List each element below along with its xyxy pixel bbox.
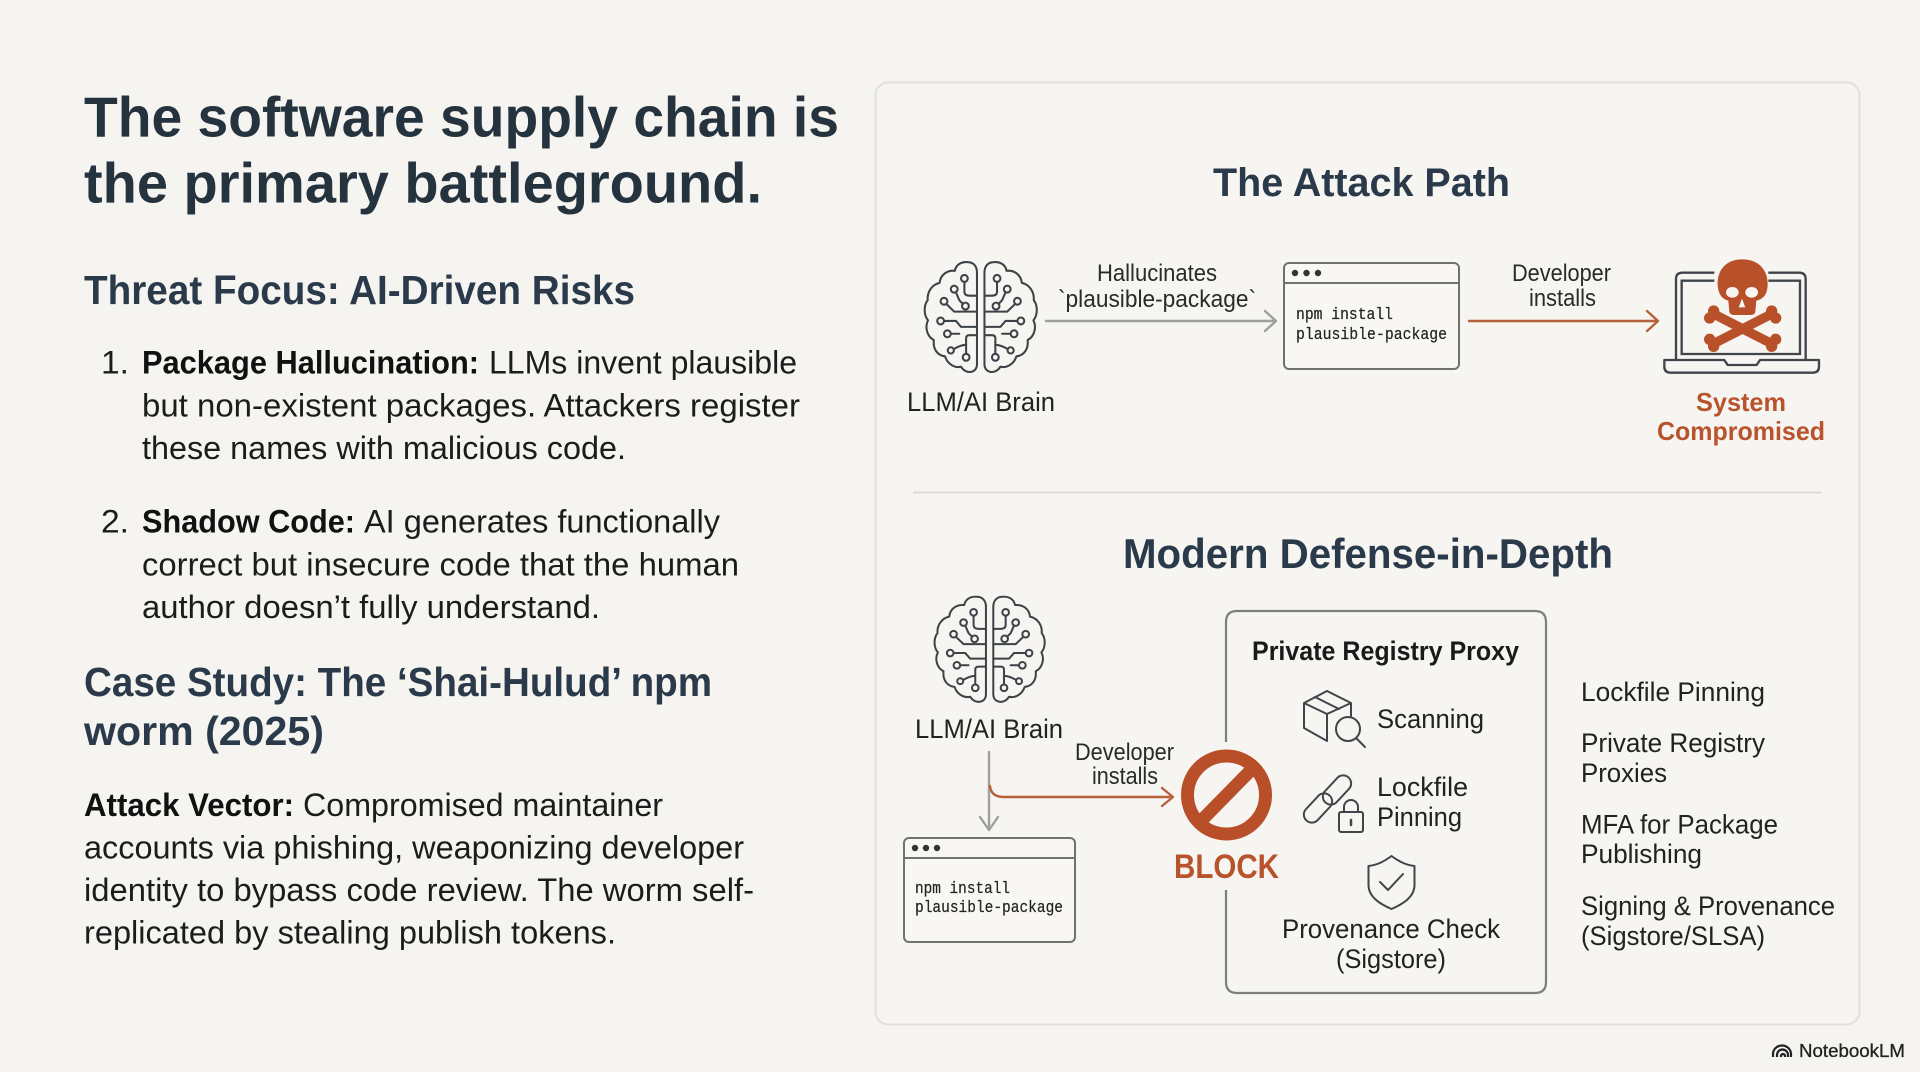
- case study text: attack vector: identity to bypass code review. The worm self-: [84, 872, 754, 908]
- icon: brain: [925, 262, 1037, 372]
- label: system compromised: [1657, 387, 1825, 446]
- list: defense measures: MFA for Package: [1581, 810, 1778, 840]
- heading: modern defense-in-depth: Modern Defense-in-Depth: [1123, 530, 1613, 577]
- arrow: terminal to compromised: [1469, 311, 1658, 331]
- label: developer installs: Developer: [1075, 739, 1174, 766]
- arrow: brain to terminal: [1046, 311, 1276, 331]
- terminal window: [1284, 263, 1459, 369]
- list item 2: shadow code: 2.: [101, 504, 129, 540]
- label: system compromised: System: [1696, 387, 1786, 417]
- icon: brain: [935, 597, 1045, 702]
- label: lockfile pinning: [1377, 772, 1468, 832]
- heading: the attack path: The Attack Path: [1213, 161, 1510, 205]
- list item 1: package hallucination: but non-existent packages. Attackers register: [142, 388, 800, 424]
- list item 2: shadow code: [101, 504, 739, 625]
- title: The software supply chain is: [84, 86, 839, 150]
- label: developer installs: [1512, 260, 1611, 312]
- list: defense measures: (Sigstore/SLSA): [1581, 921, 1765, 951]
- list: defense measures: Proxies: [1581, 758, 1667, 788]
- label: LLM/AI brain: LLM/AI Brain: [915, 714, 1063, 744]
- list: defense measures: Lockfile Pinning: [1581, 677, 1765, 707]
- heading: threat focus: Threat Focus: AI-Driven Risks: [84, 267, 635, 313]
- terminal window: [904, 838, 1075, 942]
- list item 2: shadow code: correct but insecure code that the human: [142, 546, 739, 582]
- list item 1: package hallucination: LLMs invent plausible: [489, 344, 797, 380]
- list: defense measures: Publishing: [1581, 839, 1702, 869]
- terminal window: npm install: [915, 879, 1010, 898]
- list item 2: shadow code: AI generates functionally: [364, 504, 720, 540]
- case study text: attack vector: replicated by stealing publish tokens.: [84, 914, 616, 950]
- list: defense measures: Private Registry: [1581, 728, 1765, 758]
- case study text: attack vector: accounts via phishing, weaponizing developer: [84, 830, 744, 866]
- list item 2: shadow code: author doesn’t fully understand.: [142, 589, 600, 625]
- label: provenance check: [1282, 914, 1500, 974]
- label: developer installs: Developer: [1512, 260, 1611, 287]
- title: the primary battleground.: [84, 152, 762, 216]
- heading: case study: worm (2025): [83, 708, 324, 754]
- case study text: attack vector: [84, 787, 754, 950]
- label: developer installs: installs: [1529, 285, 1596, 312]
- label: lockfile pinning: Pinning: [1377, 802, 1462, 832]
- list item 1: package hallucination: 1.: [101, 344, 129, 380]
- list item 1: package hallucination: these names with malicious code.: [142, 430, 626, 466]
- heading: private registry proxy: Private Registry Proxy: [1252, 636, 1519, 666]
- icon: chain and lock: [1301, 772, 1363, 832]
- title: [84, 86, 839, 216]
- label: LLM/AI brain: LLM/AI Brain: [907, 387, 1055, 417]
- list: defense measures: [1581, 677, 1835, 951]
- case study text: attack vector: Attack Vector:: [84, 787, 294, 823]
- label: developer installs: [1075, 739, 1174, 790]
- label: hallucinates: `plausible-package`: [1058, 286, 1256, 313]
- label: lockfile pinning: Lockfile: [1377, 772, 1468, 802]
- list: defense measures: Signing & Provenance: [1581, 891, 1835, 921]
- list item 1: package hallucination: Package Hallucination:: [142, 344, 479, 380]
- panel: diagrams: [876, 82, 1860, 1024]
- icon: compromised laptop with skull: [1664, 259, 1819, 373]
- label: provenance check: Provenance Check: [1282, 914, 1500, 944]
- heading: case study: Case Study: The ‘Shai-Hulud’ npm: [84, 659, 712, 705]
- label: system compromised: Compromised: [1657, 416, 1825, 446]
- NotebookLM logo: NotebookLM: [1799, 1041, 1905, 1061]
- label: hallucinates: Hallucinates: [1097, 260, 1217, 287]
- label: scanning: Scanning: [1377, 704, 1484, 734]
- case study text: attack vector: Compromised maintainer: [303, 787, 663, 823]
- arrow: brain to terminal: [980, 752, 998, 830]
- label: developer installs: installs: [1092, 763, 1158, 790]
- label: block: BLOCK: [1174, 848, 1279, 886]
- icon: shield check: [1368, 856, 1414, 909]
- terminal window: plausible-package: [1296, 325, 1447, 344]
- label: hallucinates: [1058, 260, 1256, 313]
- terminal window: plausible-package: [915, 898, 1063, 917]
- panel: private registry proxy: [1226, 611, 1546, 993]
- icon: package scan: [1304, 691, 1365, 747]
- terminal window: npm install: [1296, 305, 1393, 324]
- arrow: developer installs to block: [990, 786, 1173, 806]
- list item 2: shadow code: Shadow Code:: [142, 504, 355, 540]
- icon: block sign: [1188, 756, 1266, 834]
- heading: case study: [83, 659, 712, 754]
- list item 1: package hallucination: [101, 344, 800, 466]
- label: provenance check: (Sigstore): [1336, 944, 1446, 974]
